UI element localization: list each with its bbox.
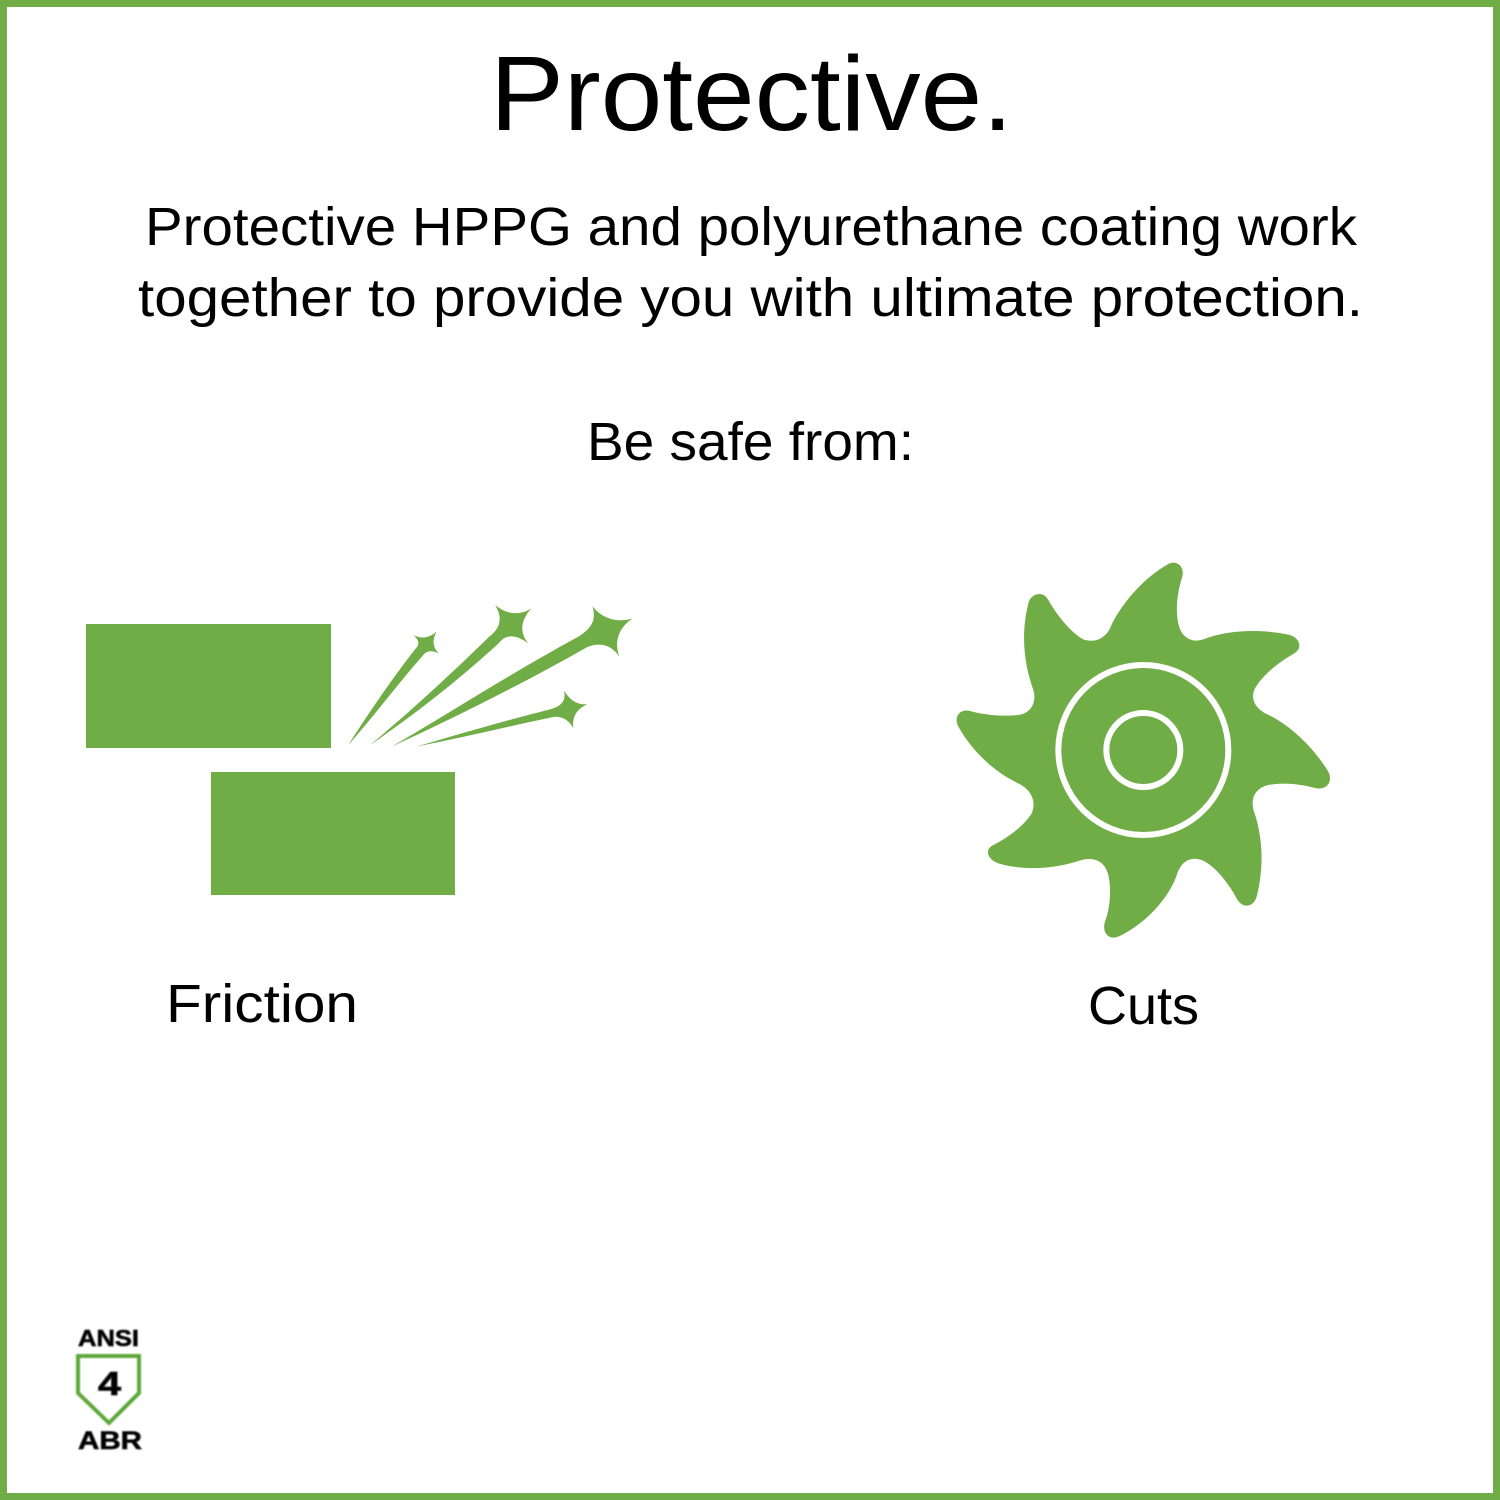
badge: ANSI 4 ABR xyxy=(78,1325,142,1455)
label: cuts: Cuts xyxy=(1088,976,1199,1036)
icon: friction blocks and sparks xyxy=(86,605,633,895)
title: Protective. xyxy=(490,35,1013,153)
icon: saw blade xyxy=(957,563,1330,938)
intro text block: Protective HPPG and polyurethane coating work xyxy=(145,197,1358,257)
badge: ANSI 4 ABR: ANSI xyxy=(78,1325,139,1351)
label: friction: Friction xyxy=(166,974,358,1034)
intro text block xyxy=(138,197,1363,328)
intro text block: together to provide you with ultimate protection. xyxy=(138,268,1363,328)
subheading: be safe from: Be safe from: xyxy=(587,412,914,472)
panel: cuts xyxy=(957,563,1330,1036)
badge: ANSI 4 ABR: 4 xyxy=(98,1365,122,1402)
icon: shield xyxy=(78,1356,139,1423)
panel: friction xyxy=(86,605,633,1034)
badge: ANSI 4 ABR: ABR xyxy=(78,1427,142,1455)
